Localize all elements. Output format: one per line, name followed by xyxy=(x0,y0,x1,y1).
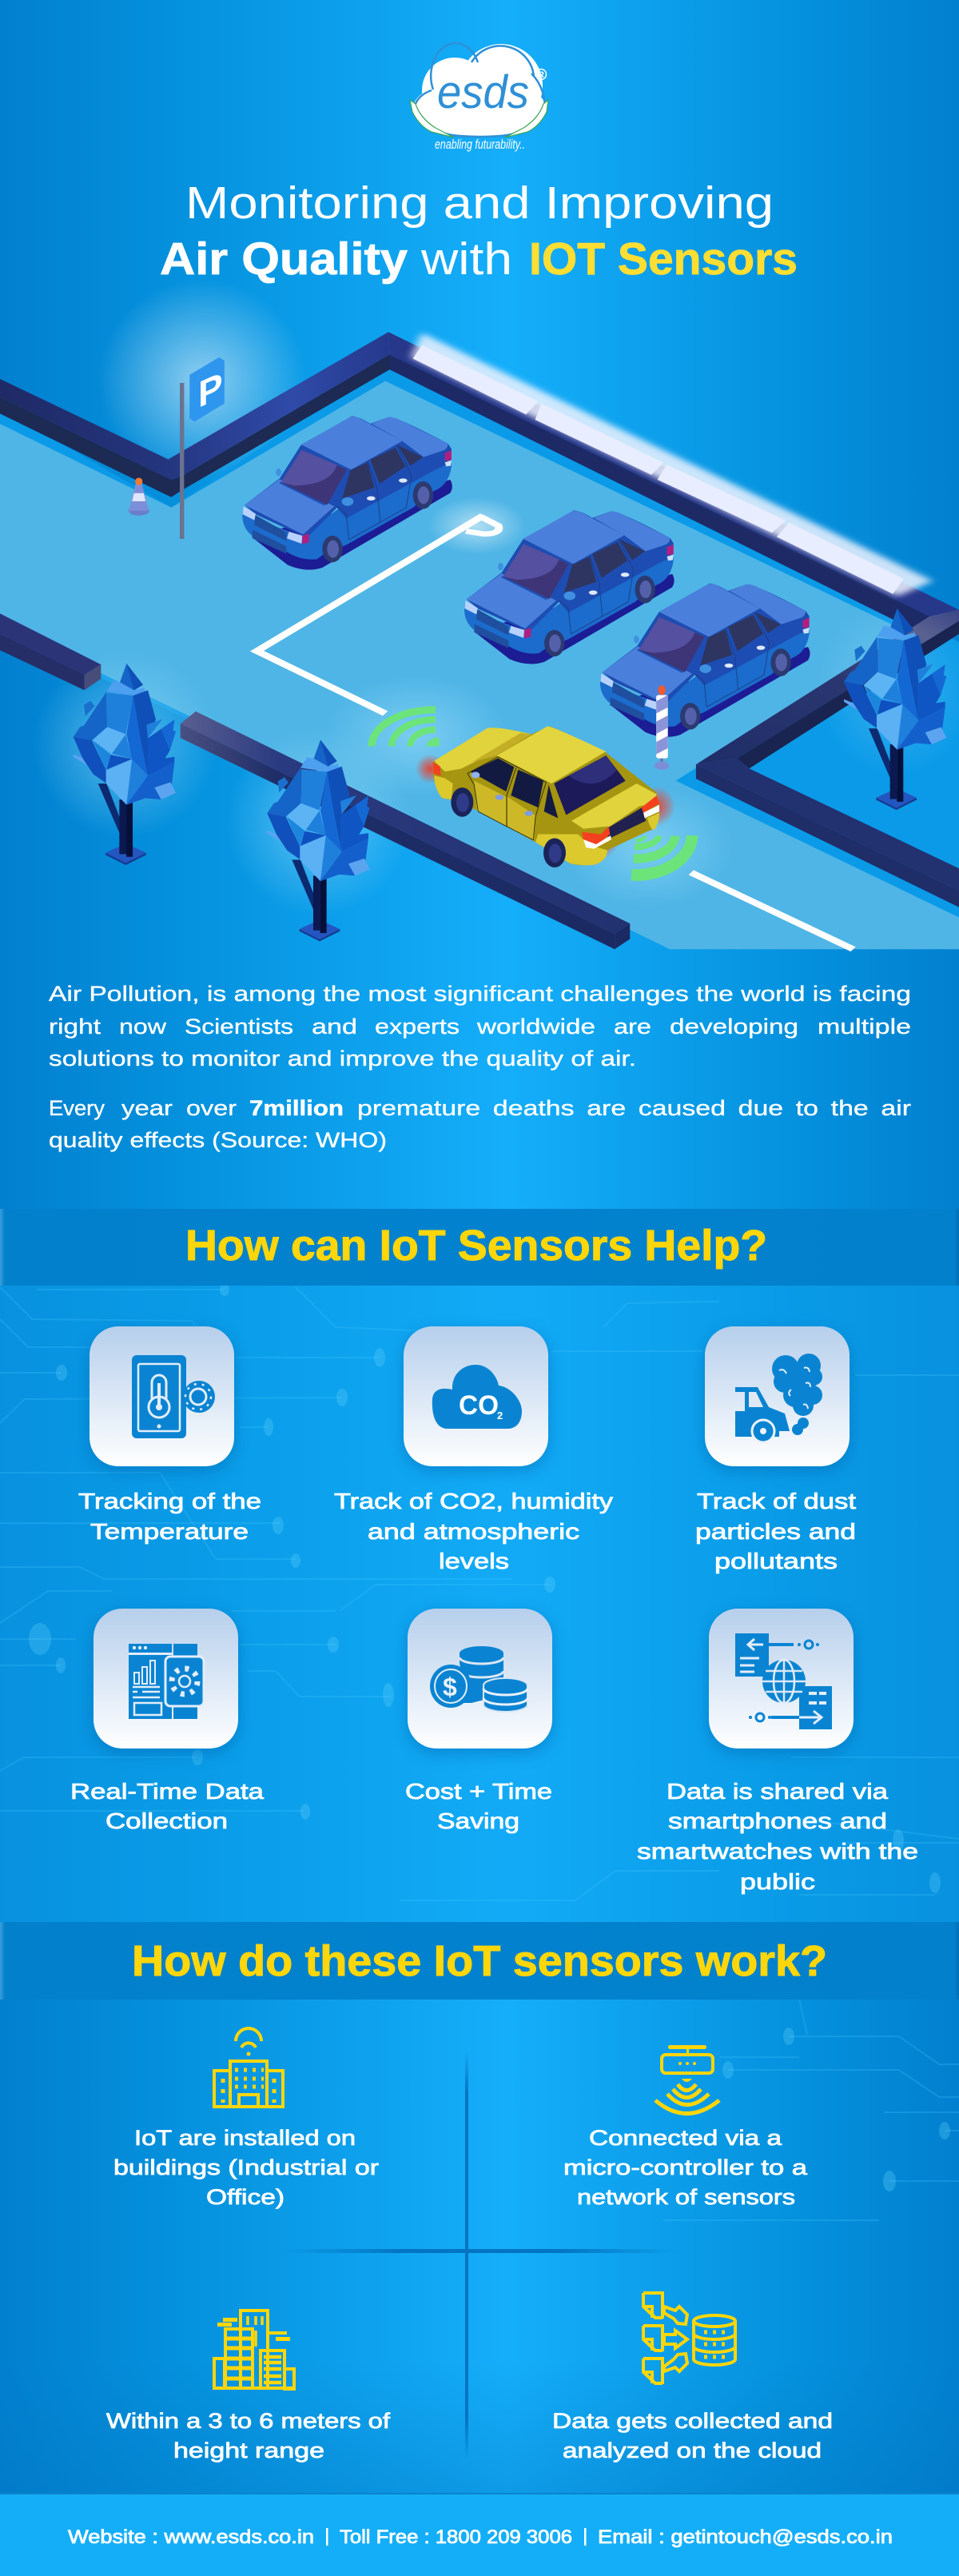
intro paragraph 2: premature deaths are caused due to the air xyxy=(357,1096,911,1120)
title xyxy=(160,177,798,285)
icon: coins and dollar: $ xyxy=(443,1673,457,1701)
tree 1 xyxy=(74,664,176,865)
striped bollard xyxy=(655,685,669,770)
label: real-time data collection: Collection xyxy=(105,1808,228,1833)
logo: esds cloud: enabling futurability.. xyxy=(435,137,525,152)
intro paragraph 2: Every xyxy=(49,1096,105,1120)
label: installed on buildings: Office) xyxy=(206,2185,285,2209)
label: connected via micro-controller: micro-controller to a xyxy=(563,2155,808,2179)
blue car 3 xyxy=(600,584,810,737)
label: installed on buildings: buildings (Industrial or xyxy=(113,2155,379,2179)
glow behind parking sign xyxy=(97,279,306,483)
icon: data flowing into database xyxy=(643,2293,735,2384)
label: data sharing: smartphones and xyxy=(668,1808,887,1833)
footer contact details: Email : getintouch@esds.co.in xyxy=(598,2526,893,2548)
icon: globe with data exchange xyxy=(735,1633,832,1729)
intro paragraph 1: solutions to monitor and improve the quality of air. xyxy=(49,1047,636,1071)
icon: micro-controller with signal xyxy=(655,2045,719,2114)
label: connected via micro-controller xyxy=(563,2126,808,2209)
label: CO2 humidity atmospheric: levels xyxy=(439,1549,509,1573)
label: installed on buildings: IoT are installed on xyxy=(134,2126,356,2150)
intro paragraph 1 xyxy=(49,982,911,1071)
intro paragraph 2: over xyxy=(186,1096,237,1120)
icon: CO2 cloud: CO xyxy=(459,1390,499,1421)
back wall glow xyxy=(411,333,933,596)
intro paragraph 1: and xyxy=(312,1015,357,1039)
intro paragraph 1: now xyxy=(119,1015,167,1039)
label: CO2 humidity atmospheric xyxy=(334,1489,613,1573)
card: temperature tracking xyxy=(90,1326,234,1471)
logo: esds cloud xyxy=(410,43,548,152)
icon: dashboard and smartwatch xyxy=(129,1644,204,1719)
card: data sharing xyxy=(709,1609,854,1753)
label: CO2 humidity atmospheric: Track of CO2, humidity xyxy=(334,1489,613,1513)
heading: how can IoT sensors help: How can IoT Sensors Help? xyxy=(185,1222,767,1270)
intro paragraph 2: quality effects (Source: WHO) xyxy=(49,1128,387,1152)
parking lot illustration xyxy=(0,279,959,949)
card: real-time data collection xyxy=(94,1609,238,1753)
wifi signal left xyxy=(372,710,440,746)
label: connected via micro-controller: Connected via a xyxy=(589,2126,782,2150)
intro paragraph 1: developing xyxy=(670,1015,798,1039)
label: collected and analyzed on the cloud: Data gets collected and xyxy=(552,2409,833,2433)
icon: CO2 cloud xyxy=(432,1365,522,1429)
icon: phone with thermometer xyxy=(132,1355,215,1438)
label: data sharing xyxy=(637,1779,918,1894)
label: installed on buildings xyxy=(113,2126,379,2209)
label: collected and analyzed on the cloud: analyzed on the cloud xyxy=(563,2438,822,2462)
label: cost and time saving xyxy=(405,1779,552,1833)
intro paragraph 1: worldwide xyxy=(476,1015,595,1039)
label: dust and pollutants xyxy=(695,1489,856,1573)
title: Air Quality xyxy=(160,233,408,285)
section two brighter backdrop xyxy=(0,1286,959,1922)
wifi signal right xyxy=(631,835,692,875)
boundary walls xyxy=(0,332,959,949)
label: real-time data collection: Real-Time Data xyxy=(70,1779,265,1804)
circuit lines: section three xyxy=(663,1999,959,2220)
curb segments xyxy=(413,345,904,594)
card: cost and time saving xyxy=(408,1609,552,1753)
traffic cone xyxy=(129,477,149,516)
label: data sharing: public xyxy=(740,1869,815,1894)
heading: how do these IoT sensors work: How do these IoT sensors work? xyxy=(132,1937,827,1985)
card: dust and pollutants xyxy=(705,1326,850,1471)
section three bottom shading xyxy=(0,2359,959,2494)
logo: esds cloud: R xyxy=(538,70,544,80)
intro paragraph 1: multiple xyxy=(818,1015,911,1039)
intro paragraph 1: Air Pollution, is among the most significant challenges the world is facing xyxy=(49,982,911,1006)
label: collected and analyzed on the cloud xyxy=(552,2409,833,2462)
icon: CO2 cloud: 2 xyxy=(497,1410,503,1422)
label: cost and time saving: Saving xyxy=(437,1808,519,1833)
band: how do these IoT sensors work xyxy=(0,1922,959,2000)
label: tracking of the temperature: Tracking of the xyxy=(78,1489,261,1513)
horizontal divider xyxy=(281,2249,679,2253)
footer contact details: Website : www.esds.co.in xyxy=(68,2526,314,2548)
label: dust and pollutants: Track of dust xyxy=(697,1489,856,1513)
tree 3 xyxy=(844,608,946,810)
label: dust and pollutants: pollutants xyxy=(714,1549,838,1573)
label: data sharing: Data is shared via xyxy=(667,1779,889,1804)
icon: coins and dollar xyxy=(430,1646,527,1712)
parking sign: P xyxy=(198,365,223,417)
intro paragraph 2 xyxy=(49,1096,911,1152)
title: with xyxy=(420,233,512,285)
label: height range xyxy=(106,2409,391,2462)
intro paragraph 2: 7million xyxy=(249,1096,344,1120)
label: CO2 humidity atmospheric: and atmospheric xyxy=(368,1519,579,1544)
label: data sharing: smartwatches with the xyxy=(637,1839,918,1864)
logo: esds cloud: esds xyxy=(437,66,529,118)
footer bar xyxy=(0,2493,959,2576)
band: how can IoT sensors help xyxy=(0,1209,959,1286)
blue car 2 xyxy=(464,510,674,664)
card: CO2 tracking xyxy=(404,1326,548,1471)
icon: truck with smoke xyxy=(735,1354,822,1442)
blue car 1 xyxy=(242,417,452,570)
intro paragraph 1: right xyxy=(49,1015,101,1039)
icon: tall buildings xyxy=(214,2311,294,2389)
circuit board background xyxy=(0,1283,959,1900)
yellow car with sensors and wifi signals xyxy=(372,710,692,875)
parking sign xyxy=(180,357,225,539)
label: height range: Within a 3 to 6 meters of xyxy=(106,2409,391,2433)
title: IOT Sensors xyxy=(529,233,798,285)
label: real-time data collection xyxy=(70,1779,265,1833)
label: connected via micro-controller: network of sensors xyxy=(577,2185,795,2209)
footer contact details xyxy=(68,2526,893,2548)
parking ground xyxy=(0,365,959,949)
label: cost and time saving: Cost + Time xyxy=(405,1779,552,1804)
title: Monitoring and Improving xyxy=(185,177,774,229)
vertical divider xyxy=(465,2052,468,2460)
label: dust and pollutants: particles and xyxy=(695,1519,856,1544)
label: tracking of the temperature xyxy=(78,1489,261,1544)
label: height range: height range xyxy=(173,2438,324,2462)
intro paragraph 2: year xyxy=(121,1096,173,1120)
intro paragraph 1: experts xyxy=(375,1015,460,1039)
icon: wifi building xyxy=(213,2028,285,2107)
parking bay lines xyxy=(257,516,483,713)
tree 2 xyxy=(267,740,370,941)
footer contact details: Toll Free : 1800 209 3006 xyxy=(340,2526,572,2548)
intro paragraph 1: are xyxy=(614,1015,651,1039)
intro paragraph 1: Scientists xyxy=(185,1015,293,1039)
label: tracking of the temperature: Temperature xyxy=(90,1519,249,1544)
